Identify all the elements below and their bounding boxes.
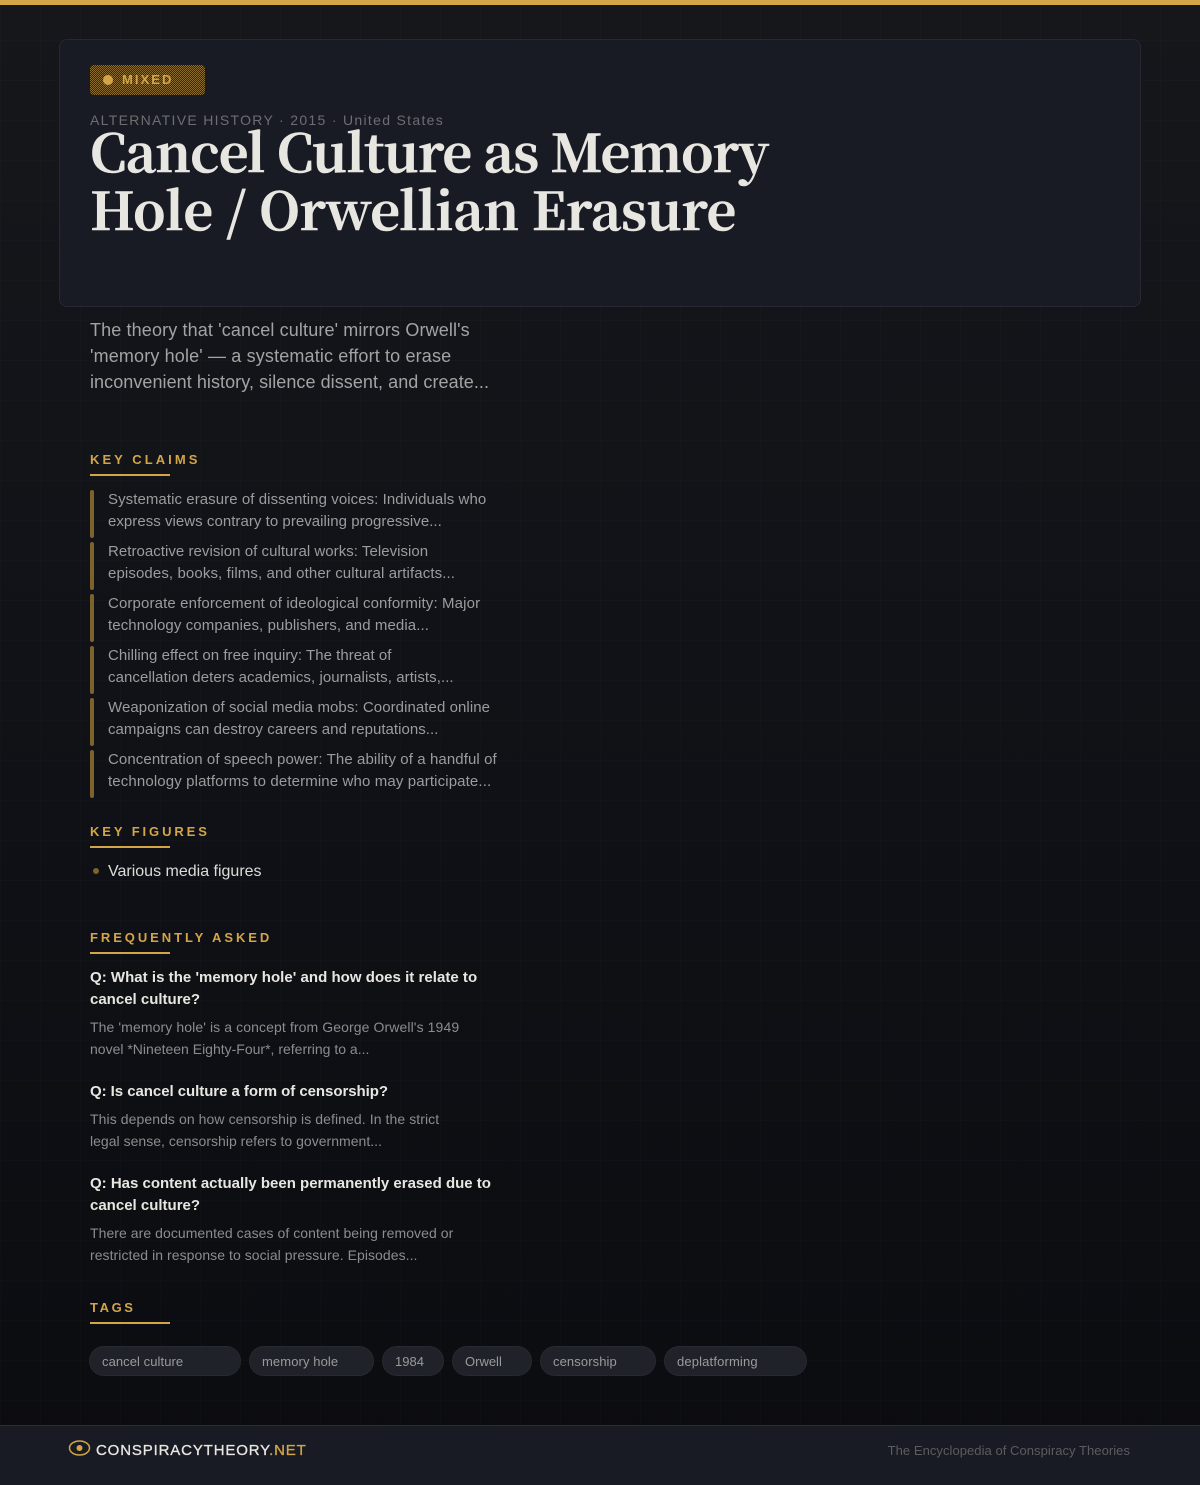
faq 1: novel *Nineteen Eighty-Four*, referring to a... <box>90 1041 369 1057</box>
faq 1: Q: What is the 'memory hole' and how does it relate to <box>90 969 477 986</box>
claim 6: technology platforms to determine who may participate... <box>108 773 491 790</box>
faq 3: restricted in response to social pressure. Episodes... <box>90 1247 417 1263</box>
tag: censorship: censorship <box>553 1354 617 1369</box>
heading: key figures: KEY FIGURES <box>90 824 210 839</box>
claim 1: express views contrary to prevailing progressive... <box>108 513 442 530</box>
summary text: inconvenient history, silence dissent, and create... <box>90 372 489 392</box>
title: Cancel Culture as Memory <box>90 112 768 187</box>
tag: memory hole: memory hole <box>262 1354 338 1369</box>
tag: cancel culture <box>89 1346 241 1376</box>
claim 4 <box>90 646 454 694</box>
tag: 1984: 1984 <box>395 1354 424 1369</box>
faq 2: This depends on how censorship is defined. In the strict <box>90 1111 439 1127</box>
tag: 1984 <box>382 1346 444 1376</box>
footer <box>0 1425 1200 1485</box>
badge: mixed verdict <box>90 65 205 95</box>
faq 1 <box>90 969 477 1057</box>
summary text <box>90 320 489 392</box>
top accent bar <box>0 0 1200 5</box>
claim 6 <box>90 750 497 798</box>
tag: cancel culture: cancel culture <box>102 1354 183 1369</box>
summary text: The theory that 'cancel culture' mirrors Orwell's <box>90 320 470 340</box>
tag: censorship <box>540 1346 656 1376</box>
tag: Orwell <box>452 1346 532 1376</box>
faq 2 <box>90 1083 440 1149</box>
list: key claims <box>90 490 497 798</box>
faq 1: cancel culture? <box>90 991 200 1008</box>
claim 4: cancellation deters academics, journalists, artists,... <box>108 669 454 686</box>
heading: key claims: KEY CLAIMS <box>90 452 200 467</box>
footer tagline: The Encyclopedia of Conspiracy Theories <box>888 1443 1130 1458</box>
icon: eye logo <box>68 1440 90 1456</box>
category meta line: ALTERNATIVE HISTORY · 2015 · United States <box>90 112 444 128</box>
tag: deplatforming <box>664 1346 807 1376</box>
faq 2: Q: Is cancel culture a form of censorship? <box>90 1083 388 1100</box>
tag: deplatforming: deplatforming <box>677 1354 758 1369</box>
summary text: 'memory hole' — a systematic effort to erase <box>90 346 451 366</box>
claim 1 <box>90 490 486 538</box>
heading: frequently asked: FREQUENTLY ASKED <box>90 930 272 945</box>
claim 3: technology companies, publishers, and media... <box>108 617 429 634</box>
claim 1: Systematic erasure of dissenting voices: Individuals who <box>108 491 486 508</box>
badge: mixed verdict: MIXED <box>122 72 173 87</box>
faq 3 <box>90 1175 491 1263</box>
claim 6: Concentration of speech power: The ability of a handful of <box>108 751 497 768</box>
heading: tags: TAGS <box>90 1300 136 1315</box>
tag: memory hole <box>249 1346 374 1376</box>
claim 5 <box>90 698 490 746</box>
faq 1: The 'memory hole' is a concept from George Orwell's 1949 <box>90 1019 459 1035</box>
claim 2: Retroactive revision of cultural works: Television <box>108 543 428 560</box>
tag: Orwell: Orwell <box>465 1354 502 1369</box>
faq 3: Q: Has content actually been permanently erased due to <box>90 1175 491 1192</box>
panel: hero header <box>59 39 1141 307</box>
figure item: Various media figures <box>108 863 262 880</box>
title <box>90 112 770 245</box>
claim 2 <box>90 542 455 590</box>
faq 3: cancel culture? <box>90 1197 200 1214</box>
faq 2: legal sense, censorship refers to government... <box>90 1133 382 1149</box>
footer logo text: CONSPIRACYTHEORY.NET <box>96 1442 307 1459</box>
claim 5: Weaponization of social media mobs: Coordinated online <box>108 699 490 716</box>
title: Hole / Orwellian Erasure <box>90 170 736 245</box>
icon: bullet <box>93 868 99 874</box>
claim 3: Corporate enforcement of ideological conformity: Major <box>108 595 480 612</box>
claim 5: campaigns can destroy careers and reputations... <box>108 721 438 738</box>
claim 3 <box>90 594 480 642</box>
faq 3: There are documented cases of content being removed or <box>90 1225 453 1241</box>
claim 4: Chilling effect on free inquiry: The threat of <box>108 647 392 664</box>
claim 2: episodes, books, films, and other cultural artifacts... <box>108 565 455 582</box>
